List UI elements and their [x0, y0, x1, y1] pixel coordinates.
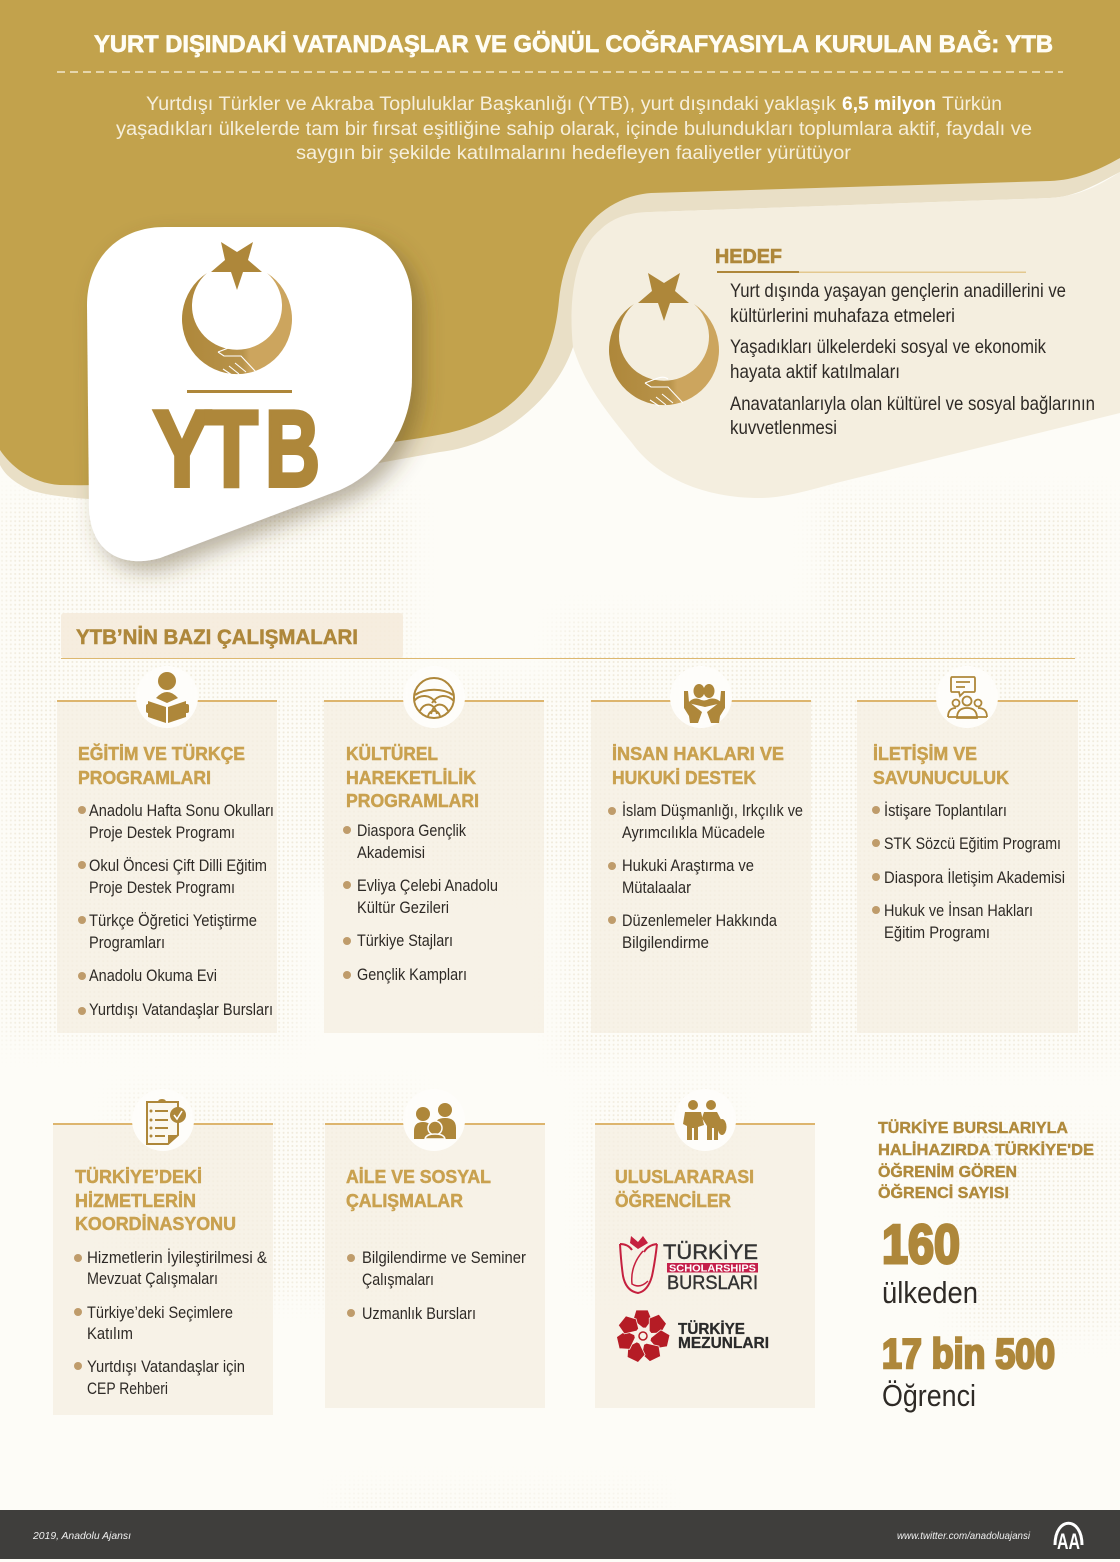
panel: Aile ve Sosyal Çalışmalar: [325, 1089, 545, 1408]
heading: KÜLTÜREL: [346, 743, 438, 764]
bullet list: Çalışmaları: [362, 1271, 434, 1289]
panel: Kültürel Hareketlilik Programları: [324, 666, 544, 1033]
heading: PROGRAMLARI: [78, 767, 211, 788]
panel: İnsan Hakları ve Hukuki Destek: [591, 666, 811, 1033]
title: YURT DIŞINDAKİ VATANDAŞLAR VE GÖNÜL COĞRAFYASIYLA KURULAN BAĞ: YTB: [94, 30, 1053, 58]
logo: Türkiye Bursları: BURSLARI: [667, 1273, 758, 1294]
heading: HUKUKİ DESTEK: [612, 767, 757, 788]
bullet list: Bilgilendirme ve Seminer: [362, 1249, 526, 1267]
bullet list: Katılım: [87, 1325, 133, 1343]
bullet list: [608, 801, 803, 952]
logo: Türkiye Bursları: TÜRKİYE: [663, 1241, 758, 1264]
bullet list: Diaspora İletişim Akademisi: [884, 868, 1065, 887]
header gold shape: [0, 0, 1120, 485]
bullet list: Uzmanlık Bursları: [362, 1305, 476, 1323]
icon: reader with book: [146, 672, 189, 723]
stat heading: [878, 1118, 1094, 1202]
logo: Türkiye Mezunları: TÜRKİYE: [678, 1319, 745, 1338]
hedef list: kuvvetlenmesi: [730, 417, 837, 439]
icon: students: [683, 1100, 726, 1140]
bullet list: Hukuki Araştırma ve: [622, 857, 754, 875]
heading: [78, 743, 245, 788]
intro paragraph: [116, 94, 1032, 164]
logo: Anadolu Ajansı: AA: [1057, 1529, 1080, 1554]
heading: [346, 1166, 491, 1211]
stat: 160: 160: [882, 1213, 960, 1275]
heading: EĞİTİM VE TÜRKÇE: [78, 743, 245, 764]
bullet list: Hukuk ve İnsan Hakları: [884, 901, 1033, 920]
panel: Türkiye bursları statistics: [878, 1118, 1094, 1413]
heading: ÇALIŞMALAR: [346, 1190, 464, 1211]
bullet list: Kültür Gezileri: [357, 899, 449, 917]
panel: YTB logo card: [87, 227, 412, 561]
bullet list: Düzenlemeler Hakkında: [622, 912, 778, 930]
bullet list: Türkiye’deki Seçimlere: [87, 1304, 233, 1322]
footer credit: 2019, Anadolu Ajansı: [32, 1530, 131, 1542]
bullet list: Proje Destek Programı: [89, 824, 235, 842]
panel: hedef background: [571, 172, 1120, 498]
heading: HİZMETLERİN: [75, 1190, 196, 1211]
panel: İletişim ve Savunuculuk: [857, 666, 1078, 1033]
bullet list: Ayrımcılıkla Mücadele: [622, 824, 765, 842]
hedef heading: HEDEF: [715, 246, 782, 268]
panel: YTB logo card: B: [265, 388, 320, 510]
bullet list: Okul Öncesi Çift Dilli Eğitim: [89, 857, 267, 875]
hedef list: Yurt dışında yaşayan gençlerin anadillerini ve: [730, 280, 1066, 302]
bullet list: [78, 802, 274, 1019]
bullet list: Yurtdışı Vatandaşlar için: [87, 1358, 245, 1376]
heading: AİLE VE SOSYAL: [346, 1166, 491, 1187]
intro paragraph: yaşadıkları ülkelerde tam bir fırsat eşitliğine sahip olarak, içinde bulundukları toplumlara aktif, faydalı ve: [116, 119, 1032, 140]
bullet list: STK Sözcü Eğitim Programı: [884, 835, 1061, 853]
bullet list: [343, 822, 498, 984]
heading: PROGRAMLARI: [346, 790, 479, 811]
icon: hedef emblem: [609, 273, 719, 406]
hedef list: hayata aktif katılmaları: [730, 361, 900, 383]
bullet list: Evliya Çelebi Anadolu: [357, 877, 498, 895]
bullet list: İstişare Toplantıları: [884, 801, 1007, 820]
heading: KOORDİNASYONU: [75, 1213, 236, 1234]
logo: Türkiye Mezunları: [616, 1310, 769, 1364]
intro paragraph: saygın bir şekilde katılmalarını hedefleyen faaliyetler yürütüyor: [296, 143, 852, 164]
header light band: [0, 0, 1120, 500]
icon: hills in circle: [414, 678, 454, 718]
heading: [612, 743, 784, 788]
footer: [0, 1510, 1120, 1562]
stat heading: HALİHAZIRDA TÜRKİYE'DE: [878, 1140, 1094, 1159]
panel: Eğitim ve Türkçe Programları: [57, 666, 277, 1033]
bullet list: Diaspora Gençlik: [357, 822, 467, 840]
background dot map: [1, 494, 1120, 1508]
bullet list: Anadolu Okuma Evi: [89, 967, 217, 985]
heading: HAREKETLİLİK: [346, 767, 477, 788]
stat: 17 bin 500: 17 bin 500: [882, 1330, 1055, 1377]
bullet list: CEP Rehberi: [87, 1380, 168, 1398]
bullet list: Proje Destek Programı: [89, 879, 235, 897]
bullet list: [74, 1248, 267, 1398]
panel: Uluslararası Öğrenciler: [595, 1089, 815, 1408]
heading: ÖĞRENCİLER: [615, 1190, 732, 1211]
hedef rule: [717, 271, 1026, 273]
bullet list: Yurtdışı Vatandaşlar Bursları: [89, 1001, 273, 1019]
heading: İLETİŞİM VE: [873, 743, 977, 764]
bullet list: Hizmetlerin İyileştirilmesi &: [87, 1248, 267, 1267]
bullet list: Eğitim Programı: [884, 924, 990, 942]
icon: hands holding people: [684, 684, 725, 723]
stat heading: ÖĞRENİM GÖREN: [878, 1162, 1017, 1181]
logo: Türkiye Mezunları: MEZUNLARI: [678, 1335, 769, 1352]
icon: clipboard checklist: [147, 1099, 186, 1144]
section heading: YTB'nin bazı çalışmaları: [61, 613, 1075, 659]
panel: Türkiye'deki Hizmetlerin Koordinasyonu: [53, 1089, 273, 1415]
panel: YTB logo card: Y: [153, 388, 211, 510]
intro paragraph: 6,5 milyon: [842, 94, 936, 115]
stat heading: TÜRKİYE BURSLARIYLA: [878, 1118, 1068, 1137]
bullet list: Anadolu Hafta Sonu Okulları: [89, 802, 274, 820]
icon: people talking: [948, 677, 987, 718]
hedef list: kültürlerini muhafaza etmeleri: [730, 305, 955, 327]
heading: [346, 743, 479, 811]
stat label: ülkeden: ülkeden: [882, 1275, 978, 1310]
bullet list: [872, 801, 1065, 942]
logo: Türkiye Bursları: SCHOLARSHIPS: [669, 1262, 756, 1274]
bullet list: Türkçe Öğretici Yetiştirme: [89, 912, 257, 930]
hedef list: Yaşadıkları ülkelerdeki sosyal ve ekonomik: [730, 336, 1046, 358]
footer url: www.twitter.com/anadoluajansi: [897, 1530, 1031, 1542]
logo: Anadolu Ajansı: [1055, 1523, 1082, 1554]
heading: [615, 1166, 754, 1211]
bullet list: Mevzuat Çalışmaları: [87, 1270, 218, 1288]
icon: family: [414, 1103, 456, 1139]
logo: Türkiye Bursları: [620, 1236, 758, 1294]
heading: İNSAN HAKLARI VE: [612, 743, 784, 764]
heading: ULUSLARARASI: [615, 1166, 754, 1187]
bullet list: Türkiye Stajları: [357, 932, 453, 950]
bullet list: Programları: [89, 934, 165, 952]
bullet list: Gençlik Kampları: [357, 966, 467, 984]
panel: hedef: [609, 246, 1095, 439]
heading: TÜRKİYE’DEKİ: [75, 1166, 202, 1187]
title divider: [57, 71, 1063, 73]
bullet list: Mütalaalar: [622, 879, 691, 897]
heading: [75, 1166, 236, 1234]
bullet list: Akademisi: [357, 844, 425, 862]
stat heading: ÖĞRENCİ SAYISI: [878, 1183, 1009, 1202]
intro paragraph: Türkün: [942, 94, 1002, 115]
heading: [873, 743, 1010, 788]
intro paragraph: Yurtdışı Türkler ve Akraba Topluluklar Başkanlığı (YTB), yurt dışındaki yaklaşık: [146, 94, 837, 115]
heading: SAVUNUCULUK: [873, 767, 1010, 788]
stat label: Öğrenci: Öğrenci: [882, 1378, 976, 1413]
bullet list: Bilgilendirme: [622, 934, 709, 952]
section heading: YTB'nin bazı çalışmaları: YTB’NİN BAZI ÇALIŞMALARI: [76, 626, 358, 649]
panel: YTB logo card: T: [205, 388, 258, 510]
bullet list: İslam Düşmanlığı, Irkçılık ve: [622, 801, 803, 820]
hedef list: [730, 280, 1095, 439]
bullet list: [347, 1249, 526, 1323]
